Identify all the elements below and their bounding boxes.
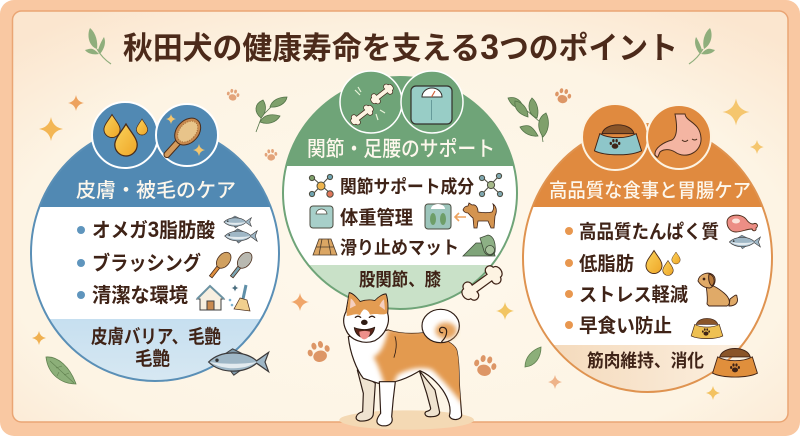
shadow — [339, 410, 474, 430]
dog illustration — [339, 293, 474, 430]
list item: joint support ingredients: 関節サポート成分 — [340, 176, 474, 197]
icon: sitting dog — [698, 273, 738, 306]
body — [348, 330, 462, 420]
icon: large bone — [457, 261, 507, 305]
list item: clean environment: 清潔な環境 — [92, 284, 188, 307]
decorative sparkles — [32, 95, 764, 400]
footer text: 筋肉維持、消化 — [587, 351, 704, 371]
icon: drops — [646, 250, 680, 276]
icon circle: food bowl — [582, 104, 648, 170]
heading: 皮膚・被毛のケア — [76, 179, 236, 202]
icon: scale with footprints — [425, 204, 451, 229]
list item: omega 3: オメガ3脂肪酸 — [92, 217, 215, 242]
list item: slow eating: 早食い防止 — [579, 315, 672, 337]
icon circle: bones — [340, 71, 402, 133]
head — [344, 293, 388, 342]
icon: rolled mat — [463, 235, 495, 256]
icon: large fish — [209, 349, 269, 375]
icon: slow feeder bowl — [691, 318, 723, 339]
panel: quality diet and stomach care — [515, 104, 780, 395]
heading: 関節・足腰のサポート — [307, 138, 495, 161]
tail — [422, 309, 459, 343]
leaf sprig right — [508, 98, 548, 142]
decorative paws — [226, 87, 572, 378]
far rear leg — [419, 371, 440, 417]
icon: title sprig left — [85, 28, 111, 64]
neck crease — [394, 337, 396, 357]
footer text: 股関節、膝 — [359, 269, 441, 290]
icon circle: stomach — [647, 105, 711, 169]
near front leg — [377, 382, 395, 426]
list item: low fat: 低脂肪 — [579, 253, 634, 275]
icon circle: scale — [401, 71, 463, 133]
list item: non-slip mat: 滑り止めマット — [340, 237, 459, 258]
icon: large bowl — [713, 348, 757, 377]
footer text — [91, 326, 221, 370]
leaf lower right — [525, 347, 541, 367]
icon: small scale — [310, 206, 333, 228]
heading: 高品質な食事と胃腸ケア — [549, 180, 751, 202]
panel body — [515, 120, 780, 395]
icon: molecule right — [479, 173, 503, 197]
icon: molecule left — [309, 174, 333, 197]
footer text: 皮膚バリア、毛艶 — [91, 326, 221, 348]
icon: title sprig right — [689, 28, 715, 64]
panel: joints and hips support — [282, 70, 518, 310]
icon: wooden floor — [313, 239, 337, 255]
icon: fish — [729, 235, 760, 249]
icon: brushes — [206, 249, 255, 281]
body coat — [373, 328, 463, 405]
panel: skin and coat care — [20, 102, 290, 389]
icon: fish pair — [224, 216, 257, 243]
leaf lower left — [46, 357, 76, 384]
leaf sprig upper left — [256, 97, 287, 132]
icon: broom — [229, 284, 250, 311]
list item: weight management: 体重管理 — [340, 206, 413, 229]
icon circle: brush — [156, 104, 218, 166]
icon: meat — [727, 215, 757, 232]
title: 秋田犬の健康寿命を支える3つのポイント — [123, 28, 678, 67]
footer text: 毛艶 — [135, 348, 170, 370]
list item: brushing: ブラッシング — [92, 251, 201, 275]
icon: standing dog — [463, 203, 496, 228]
icon: house — [197, 286, 224, 310]
panel body — [282, 76, 518, 310]
far front leg — [356, 370, 375, 421]
list item: stress reduction: ストレス軽減 — [579, 283, 688, 306]
list item: quality protein: 高品質たんぱく質 — [579, 221, 719, 243]
icon circle: oil drops — [92, 102, 158, 168]
panel body — [30, 142, 280, 382]
arrow — [455, 213, 466, 221]
